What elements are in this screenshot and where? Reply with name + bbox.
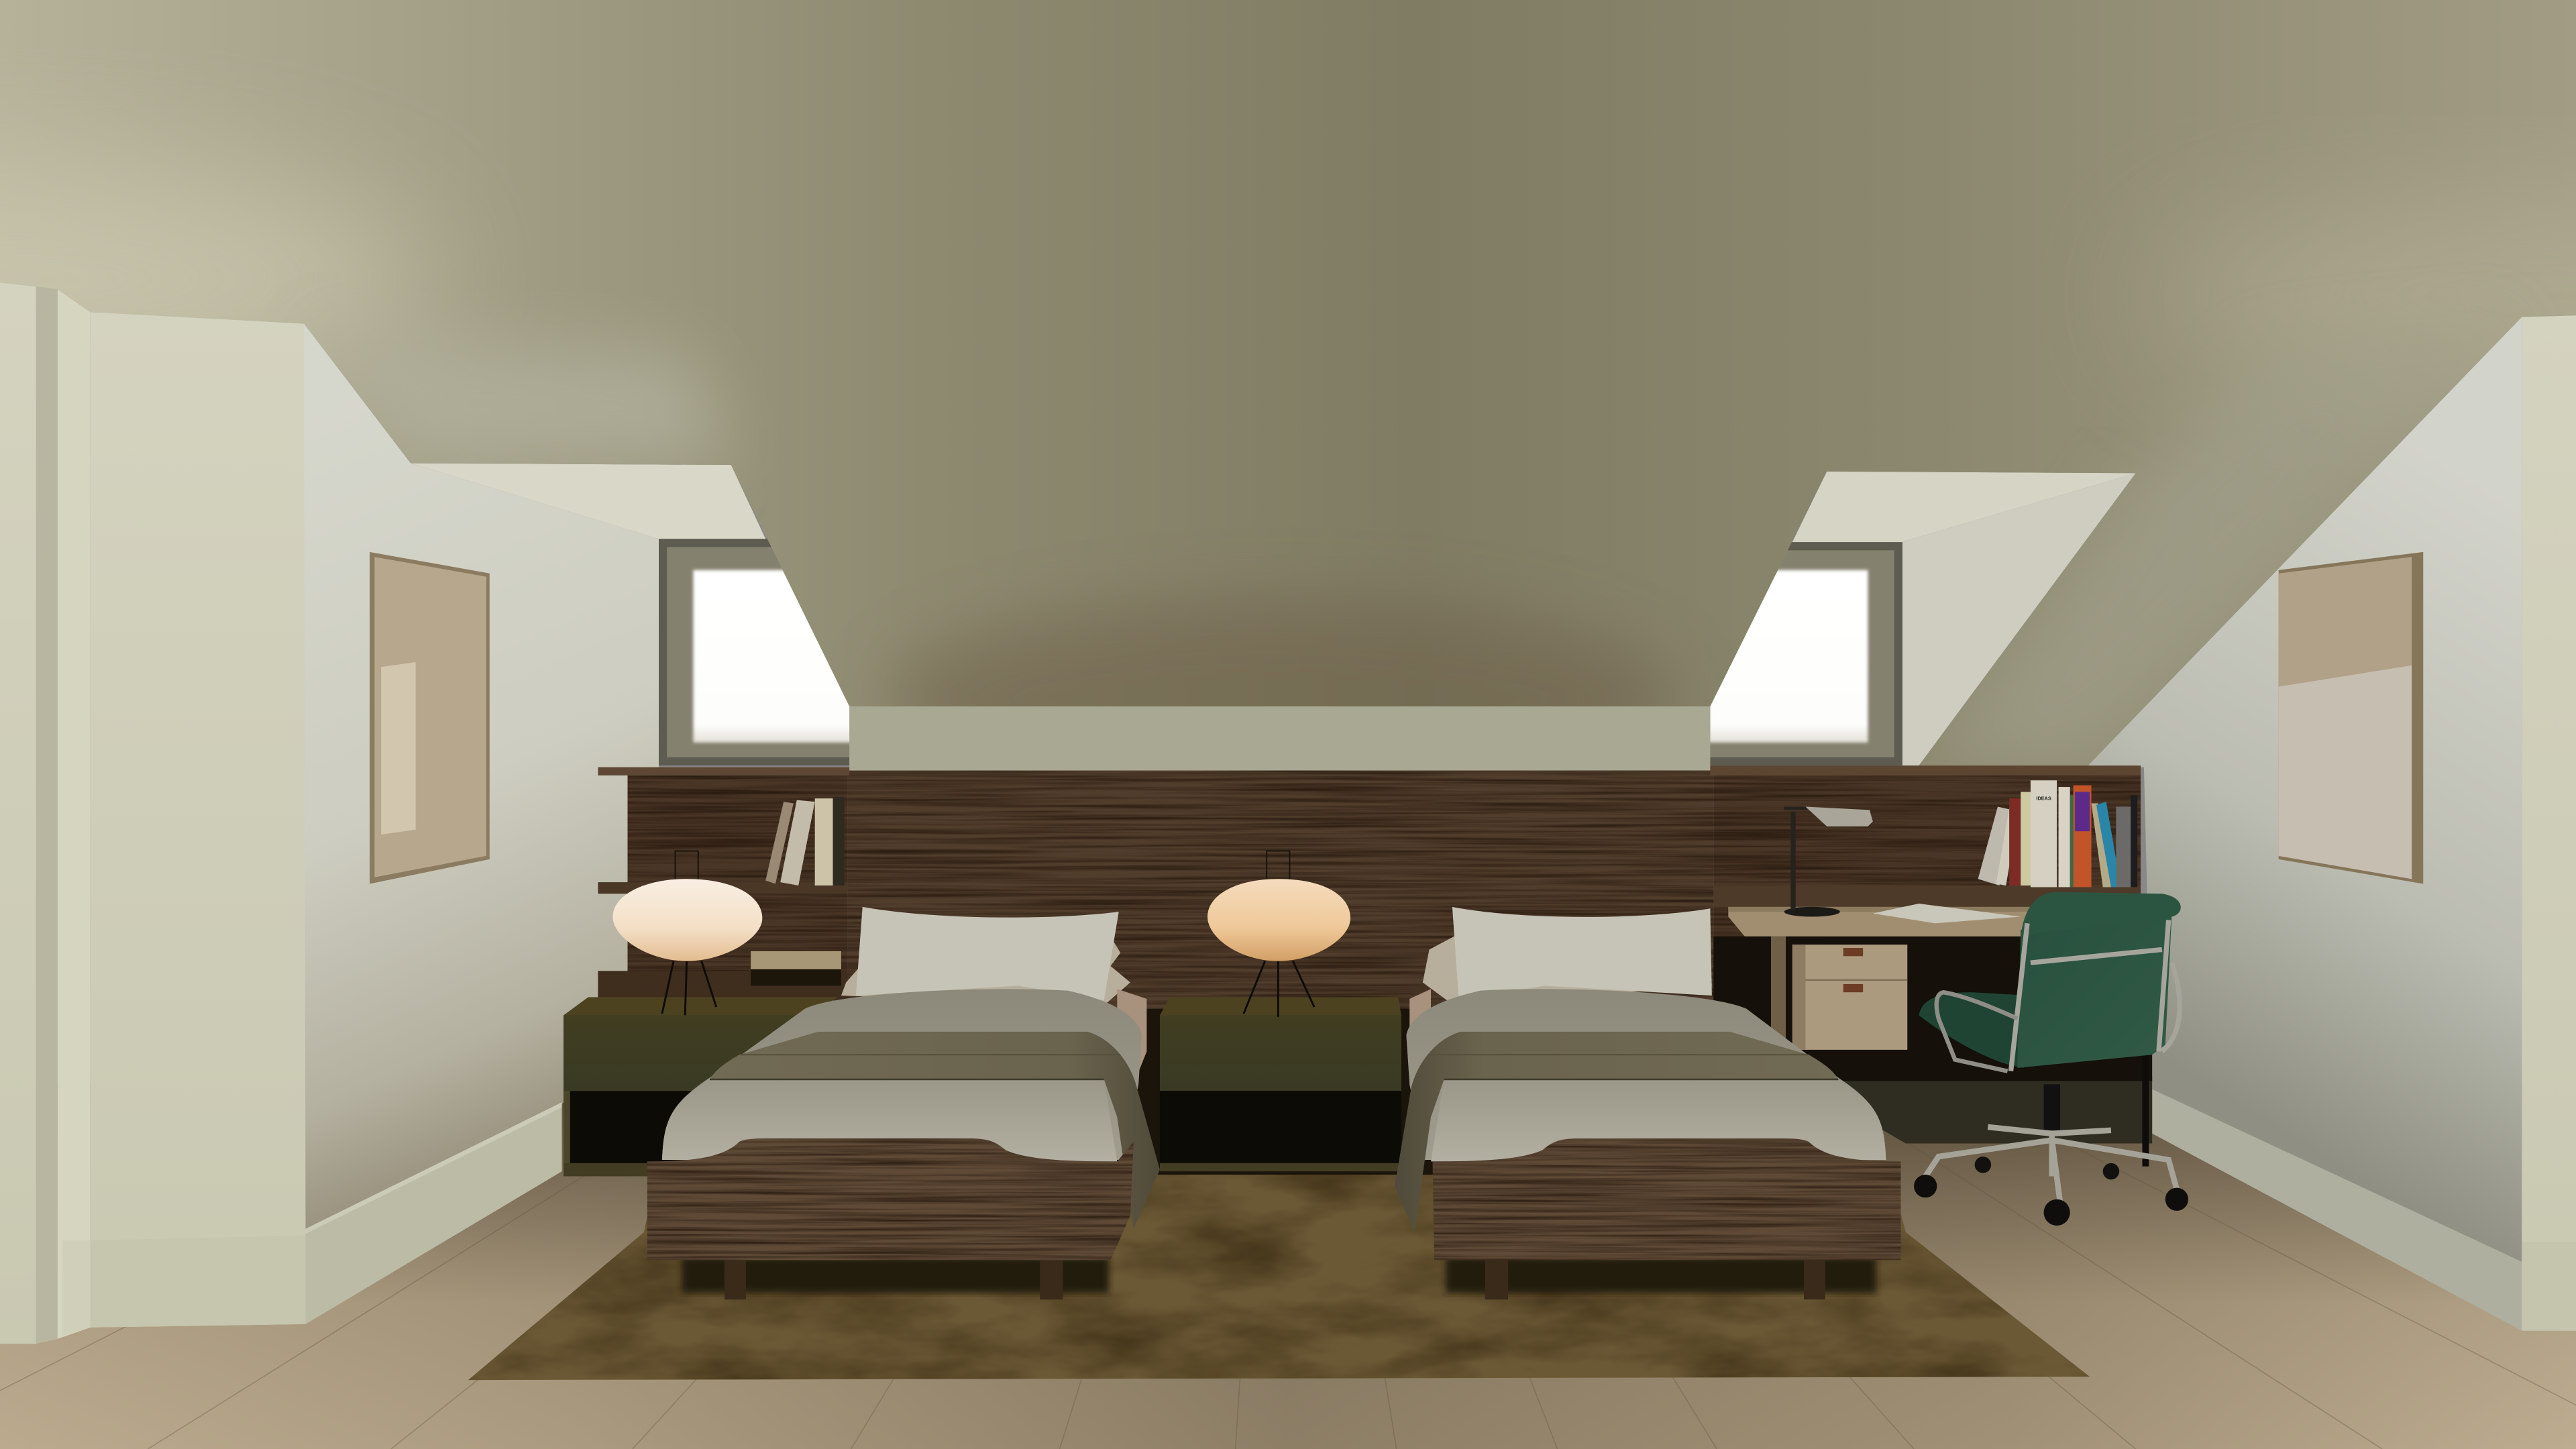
drawer unit: [1792, 945, 1907, 1050]
main pillow: [856, 907, 1119, 1000]
duvet: [1406, 989, 1886, 1160]
duvet: [662, 989, 1142, 1160]
seat: [1919, 992, 2031, 1068]
throw blanket: [1395, 1032, 1838, 1232]
lower bedding: [1431, 1079, 1886, 1161]
chrome frame: [2011, 920, 2180, 1071]
ceiling and central slope: [0, 0, 2576, 797]
nightstand: left: [564, 998, 843, 1176]
lower bedding: [662, 1079, 1117, 1161]
desk cabinet recess: [1713, 936, 2152, 1081]
window: left: [659, 539, 853, 765]
chair base: [1914, 1084, 2188, 1226]
books: left shelf: [765, 797, 845, 885]
bed shadow and legs: [682, 1256, 1109, 1299]
floor: [0, 739, 2576, 1449]
right side wall: [2086, 317, 2522, 1331]
window: right: [1709, 542, 1902, 765]
throw blanket: [710, 1032, 1160, 1229]
right shelving with wood back: [1710, 765, 2141, 994]
lamp: middle: [1208, 851, 1350, 1017]
headboard wood panel: [848, 771, 1713, 1009]
rug: [468, 1170, 2090, 1380]
magazine on desk: [1873, 904, 2021, 923]
under desk wall: [1790, 1076, 2152, 1143]
pale wall band above headboard: [849, 706, 1710, 771]
desk: [1728, 907, 2149, 1167]
dormer ceiling: right: [1792, 472, 2136, 542]
back wall behind furniture: [848, 985, 1713, 1175]
book spine title: IDEAS: [2036, 796, 2051, 802]
books: right shelf: [1978, 780, 2137, 887]
dormer ceiling: left: [411, 464, 765, 539]
nightstand: middle: [1160, 998, 1401, 1171]
mattress sheet edge: [1409, 989, 1431, 1084]
left side wall: [304, 323, 659, 1324]
desk lamp: [1784, 806, 1873, 917]
bed shadow and legs: [1446, 1256, 1876, 1299]
back pillow edges: [841, 936, 1130, 1006]
lamp: left: [612, 851, 762, 1015]
mattress sheet edge: [1117, 989, 1146, 1084]
footboard: [647, 1138, 1134, 1260]
dormer cheek: right: [1900, 473, 2136, 765]
left wall pillar: [0, 282, 306, 1344]
armrest: [1937, 992, 2017, 1071]
office chair: [1914, 892, 2188, 1226]
backrest: [2017, 914, 2172, 1068]
left shelving: [598, 767, 849, 1000]
back pillow edges: [1423, 936, 1712, 1006]
right pillar: [2522, 315, 2576, 1331]
painting: left wall: [370, 552, 490, 884]
bed: left: [647, 907, 1160, 1299]
main pillow: [1452, 907, 1712, 1000]
bed: right: [1395, 907, 1900, 1299]
painting: right wall: [2279, 552, 2423, 884]
footboard: [1433, 1138, 1900, 1260]
top roll: [2021, 892, 2181, 936]
